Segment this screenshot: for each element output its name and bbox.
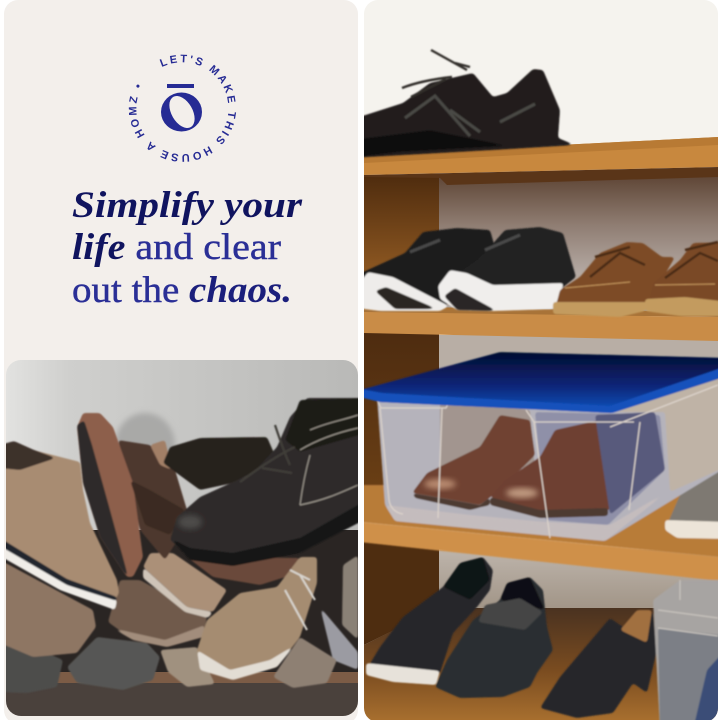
- wall: [6, 360, 358, 530]
- far right shoe and towel: [320, 555, 358, 670]
- bench and dark front: [6, 530, 358, 716]
- fuzzy slippers: [160, 637, 337, 688]
- floor of bottom shelf: [364, 608, 718, 720]
- interior back wall row 2: [438, 176, 718, 316]
- black leather boot: [170, 398, 370, 566]
- gray slippers: [0, 636, 160, 693]
- black sneaker on top shelf: [350, 50, 575, 158]
- photo: organized shoe shelves: [350, 0, 720, 720]
- lower suede shoes: [0, 553, 227, 657]
- third shelf: [350, 485, 720, 582]
- title line 3: out the chaos.: [72, 270, 292, 311]
- overturned brown shoe with sole: [77, 413, 143, 577]
- brown sole beneath black shoe: [187, 557, 300, 585]
- wall upper: [364, 0, 718, 160]
- title line 2: life and clear: [72, 227, 281, 268]
- icon: logo letter o with macron: [161, 84, 202, 132]
- clear storage box with dress shoes: [377, 372, 720, 541]
- box body: [376, 400, 718, 542]
- tan suede boot: [0, 441, 119, 610]
- brown boat shoes: [553, 242, 720, 317]
- blue box lid: [356, 352, 720, 413]
- interior back wall row 4: [439, 550, 712, 608]
- box ribs: [377, 385, 718, 538]
- second shelf: [364, 306, 718, 341]
- laces: [402, 50, 470, 97]
- tan suede shoe with laces: [197, 557, 317, 680]
- left side panel row 4: [364, 540, 439, 645]
- panel: left cream background: [4, 0, 358, 720]
- photo: messy pile of shoes: [0, 360, 370, 716]
- black shoes on bottom shelf: [366, 557, 657, 718]
- strap shoe sole fragment: [130, 480, 185, 535]
- left side panel row 2: [364, 177, 439, 273]
- circular logo text: LET'S MAKE THIS HOUSE A HOMZ •: [128, 54, 236, 162]
- dress shoes: [412, 412, 665, 518]
- clear box bottom right: [653, 580, 720, 720]
- translucent base: [387, 500, 656, 542]
- dark shoe behind: [163, 437, 277, 490]
- gray shoe: [665, 465, 720, 539]
- title: [72, 185, 303, 311]
- title line 1: Simplify your: [72, 185, 303, 226]
- brown shoe straps behind: [118, 440, 190, 560]
- logo badge: [128, 54, 236, 162]
- left side panel row 3: [364, 333, 439, 493]
- black sneakers on second shelf: [350, 227, 576, 311]
- top shelf: [364, 137, 718, 185]
- interior back wall row 3: [439, 335, 718, 370]
